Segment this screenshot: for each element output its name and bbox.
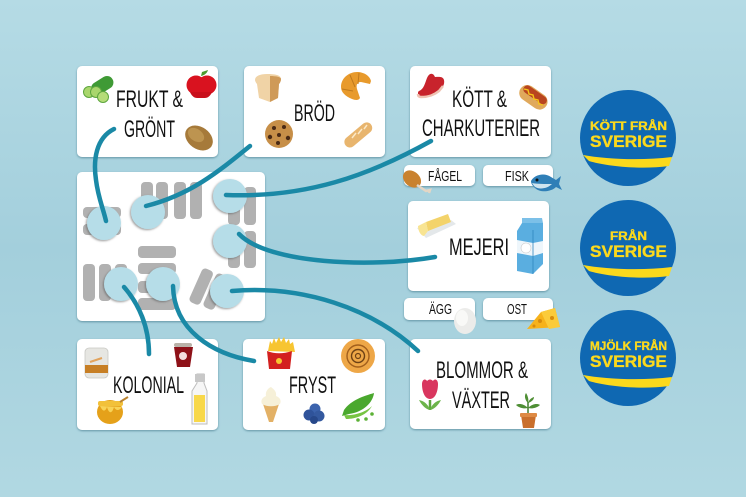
panel: ägg xyxy=(404,298,475,320)
icon: chicken leg xyxy=(400,167,430,193)
panel: fisk xyxy=(483,165,553,186)
panel: frukt och grönt: FRUKT & xyxy=(116,86,183,113)
panel: fågel: FÅGEL xyxy=(428,168,462,185)
shelves xyxy=(83,182,256,311)
panel: fryst: FRYST xyxy=(289,372,336,399)
icon: cucumber xyxy=(84,74,116,102)
panel: mejeri: MEJERI xyxy=(449,234,509,261)
icon: potted plant xyxy=(516,393,540,428)
icon: bread loaf xyxy=(255,74,281,102)
panel: ost xyxy=(483,298,553,320)
icon: apple xyxy=(186,70,216,98)
icon: french fries xyxy=(267,337,295,369)
panel: kött och charkuterier xyxy=(410,66,551,157)
panel: fisk: FISK xyxy=(505,169,529,185)
badge: kött från sverige: KÖTT FRÅN xyxy=(590,120,667,133)
panel: kött och charkuterier: KÖTT & xyxy=(452,86,507,113)
panel: bröd xyxy=(244,66,385,157)
panel: mejeri xyxy=(408,201,549,291)
connector lines xyxy=(95,129,435,361)
panel: frukt och grönt: GRÖNT xyxy=(124,116,175,143)
panel: blommor och växter: BLOMMOR & xyxy=(436,357,528,384)
panel: fågel xyxy=(404,165,475,186)
icon: egg xyxy=(454,308,476,334)
badge: mjölk från sverige xyxy=(580,310,676,406)
icon: fish xyxy=(531,174,562,191)
icon: jam xyxy=(174,343,193,367)
panel: fryst xyxy=(243,337,385,430)
icon: jar xyxy=(85,348,108,378)
badge: kött från sverige xyxy=(580,90,676,186)
icon: butter xyxy=(417,214,456,238)
icon: cinnamon bun xyxy=(341,339,375,373)
icon: tulip xyxy=(419,380,441,410)
icon: oil bottle xyxy=(192,374,207,424)
location markers xyxy=(87,179,247,308)
icon: cookie xyxy=(265,120,293,148)
icon: croissant xyxy=(341,72,371,100)
icon: steak xyxy=(418,74,444,97)
icon: hot dog xyxy=(516,82,551,113)
panel: ost: OST xyxy=(507,302,527,318)
icon: potato xyxy=(180,120,218,156)
panel: store map xyxy=(77,172,265,321)
panel: bröd: BRÖD xyxy=(294,100,335,127)
panel: blommor och växter xyxy=(410,339,551,429)
icon: cheese xyxy=(527,308,560,329)
panel: kolonial: KOLONIAL xyxy=(113,372,184,399)
panel: kolonial xyxy=(77,339,218,430)
panel: ägg: ÄGG xyxy=(429,301,452,318)
panel: kött och charkuterier: CHARKUTERIER xyxy=(422,115,540,142)
badge: mjölk från sverige: SVERIGE xyxy=(590,352,667,371)
panel: frukt och grönt xyxy=(77,66,218,157)
badge: kött från sverige: SVERIGE xyxy=(590,132,667,151)
icon: baguette xyxy=(342,120,374,150)
icon: milk carton xyxy=(517,218,543,274)
badge: från sverige: FRÅN xyxy=(610,230,647,243)
badge: mjölk från sverige: MJÖLK FRÅN xyxy=(590,340,667,353)
icon: honey pot xyxy=(97,397,128,424)
icon: blueberries xyxy=(304,404,324,424)
panel: blommor och växter: VÄXTER xyxy=(452,387,510,414)
badge: från sverige xyxy=(580,200,676,296)
badge: från sverige: SVERIGE xyxy=(590,242,667,261)
icon: ice cream xyxy=(261,387,281,422)
icon: peas xyxy=(342,393,374,422)
